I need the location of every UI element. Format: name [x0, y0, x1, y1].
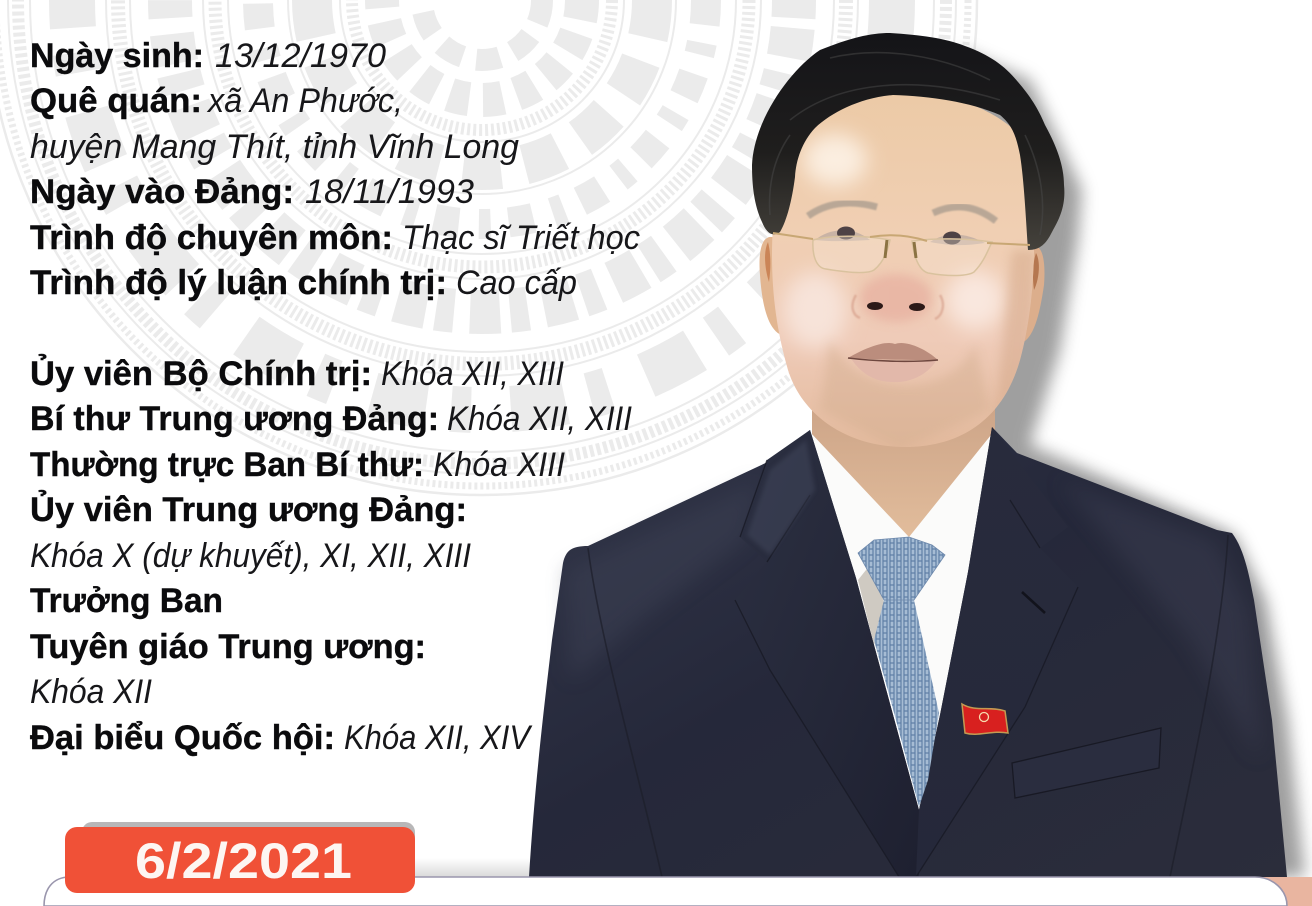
home town	[30, 82, 403, 120]
upper lip	[848, 343, 938, 360]
political theory level: Trình độ lý luận chính trị:	[30, 264, 447, 302]
central committee: Ủy viên Trung ương Đảng:	[30, 491, 467, 529]
shirt shadow	[858, 565, 887, 645]
tie knot	[858, 537, 945, 600]
hair	[752, 33, 1064, 250]
national assembly: Khóa XII, XIV	[344, 719, 533, 757]
sleeve seam left	[588, 548, 662, 877]
right eye	[930, 235, 985, 245]
left lens	[813, 236, 890, 273]
right cheek highlight	[945, 270, 1005, 330]
date badge body	[65, 827, 415, 893]
left cheek highlight	[783, 272, 847, 348]
party flag pin	[962, 704, 1008, 734]
national assembly	[30, 719, 533, 757]
propaganda commission: Tuyên giáo Trung ương:	[30, 628, 426, 666]
left ear	[760, 237, 784, 336]
jaw stubble shade	[824, 346, 986, 438]
left eye	[815, 230, 870, 241]
right lens	[912, 239, 992, 276]
date text: 6/2/2021	[135, 833, 352, 889]
home town: Quê quán:	[30, 82, 202, 120]
left lapel	[735, 430, 919, 877]
education: Trình độ chuyên môn:	[30, 219, 393, 257]
politburo member: Ủy viên Bộ Chính trị:	[30, 355, 372, 393]
lapel stitching	[735, 460, 1078, 877]
right side shade	[996, 248, 1034, 406]
background: bronze drum pattern	[0, 0, 977, 495]
politburo member: Khóa XII, XIII	[381, 355, 564, 393]
birth date	[30, 37, 386, 75]
right ear inner	[1033, 253, 1039, 290]
upper lapel sheen	[747, 440, 815, 555]
politburo member	[30, 355, 564, 393]
suit jacket body	[529, 427, 1287, 877]
commission term: Khóa XII	[30, 673, 153, 711]
party join date	[30, 173, 474, 211]
date badge	[65, 822, 415, 893]
permanent secretariat: Khóa XIII	[433, 446, 566, 484]
bottom strip shadow behind date badge	[415, 858, 535, 877]
central committee terms: Khóa X (dự khuyết), XI, XII, XIII	[30, 537, 472, 575]
pin emblem	[980, 712, 988, 722]
right iris	[943, 232, 961, 244]
left iris	[837, 226, 855, 240]
home town line 2: huyện Mang Thít, tỉnh Vĩnh Long	[30, 128, 519, 166]
nose shade	[860, 274, 932, 322]
pin flag	[962, 704, 1008, 734]
birth date: 13/12/1970	[215, 37, 386, 75]
sleeve seam right	[1170, 535, 1228, 877]
party secretariat	[30, 400, 632, 438]
biography text block	[30, 37, 640, 757]
right nostril	[909, 303, 925, 311]
permanent secretariat: Thường trực Ban Bí thư:	[30, 446, 424, 484]
education: Thạc sĩ Triết học	[402, 219, 640, 257]
portrait of the man in a dark suit	[529, 33, 1305, 877]
head of commission: Trưởng Ban	[30, 582, 223, 620]
shoulder highlight left	[566, 480, 760, 680]
lapel buttonhole	[1022, 592, 1045, 613]
left eyebrow	[808, 203, 877, 216]
political theory level: Cao cấp	[456, 264, 577, 302]
drop shadow of portrait	[950, 50, 1305, 877]
party secretariat: Khóa XII, XIII	[447, 400, 632, 438]
right ear	[1018, 246, 1044, 344]
right lapel	[916, 427, 1078, 877]
birth date: Ngày sinh:	[30, 37, 204, 75]
bottom right pink background corner	[1255, 877, 1312, 906]
home town: xã An Phước,	[206, 82, 403, 120]
shoulder highlight right	[1060, 480, 1260, 760]
national assembly: Đại biểu Quốc hội:	[30, 719, 335, 757]
left ear inner	[765, 242, 770, 282]
glasses	[773, 233, 1030, 276]
party join date: Ngày vào Đảng:	[30, 173, 294, 211]
bottom content panel	[44, 877, 1287, 906]
neck	[812, 380, 995, 540]
party secretariat: Bí thư Trung ương Đảng:	[30, 400, 439, 438]
shirt collar	[810, 430, 995, 805]
mouth line	[848, 358, 938, 361]
date badge shadow	[82, 822, 415, 862]
hair strands	[770, 53, 1043, 235]
forehead highlight	[803, 134, 867, 186]
tie blade	[874, 600, 939, 807]
education	[30, 219, 640, 257]
left nostril	[867, 302, 883, 310]
face	[772, 89, 1034, 447]
party join date: 18/11/1993	[305, 173, 474, 211]
nose pads	[885, 240, 916, 258]
lower lip	[852, 360, 936, 382]
breast pocket	[1012, 728, 1161, 798]
nose crease	[853, 295, 943, 319]
glasses bridge and arms	[773, 233, 1030, 245]
right eyebrow	[933, 207, 996, 221]
